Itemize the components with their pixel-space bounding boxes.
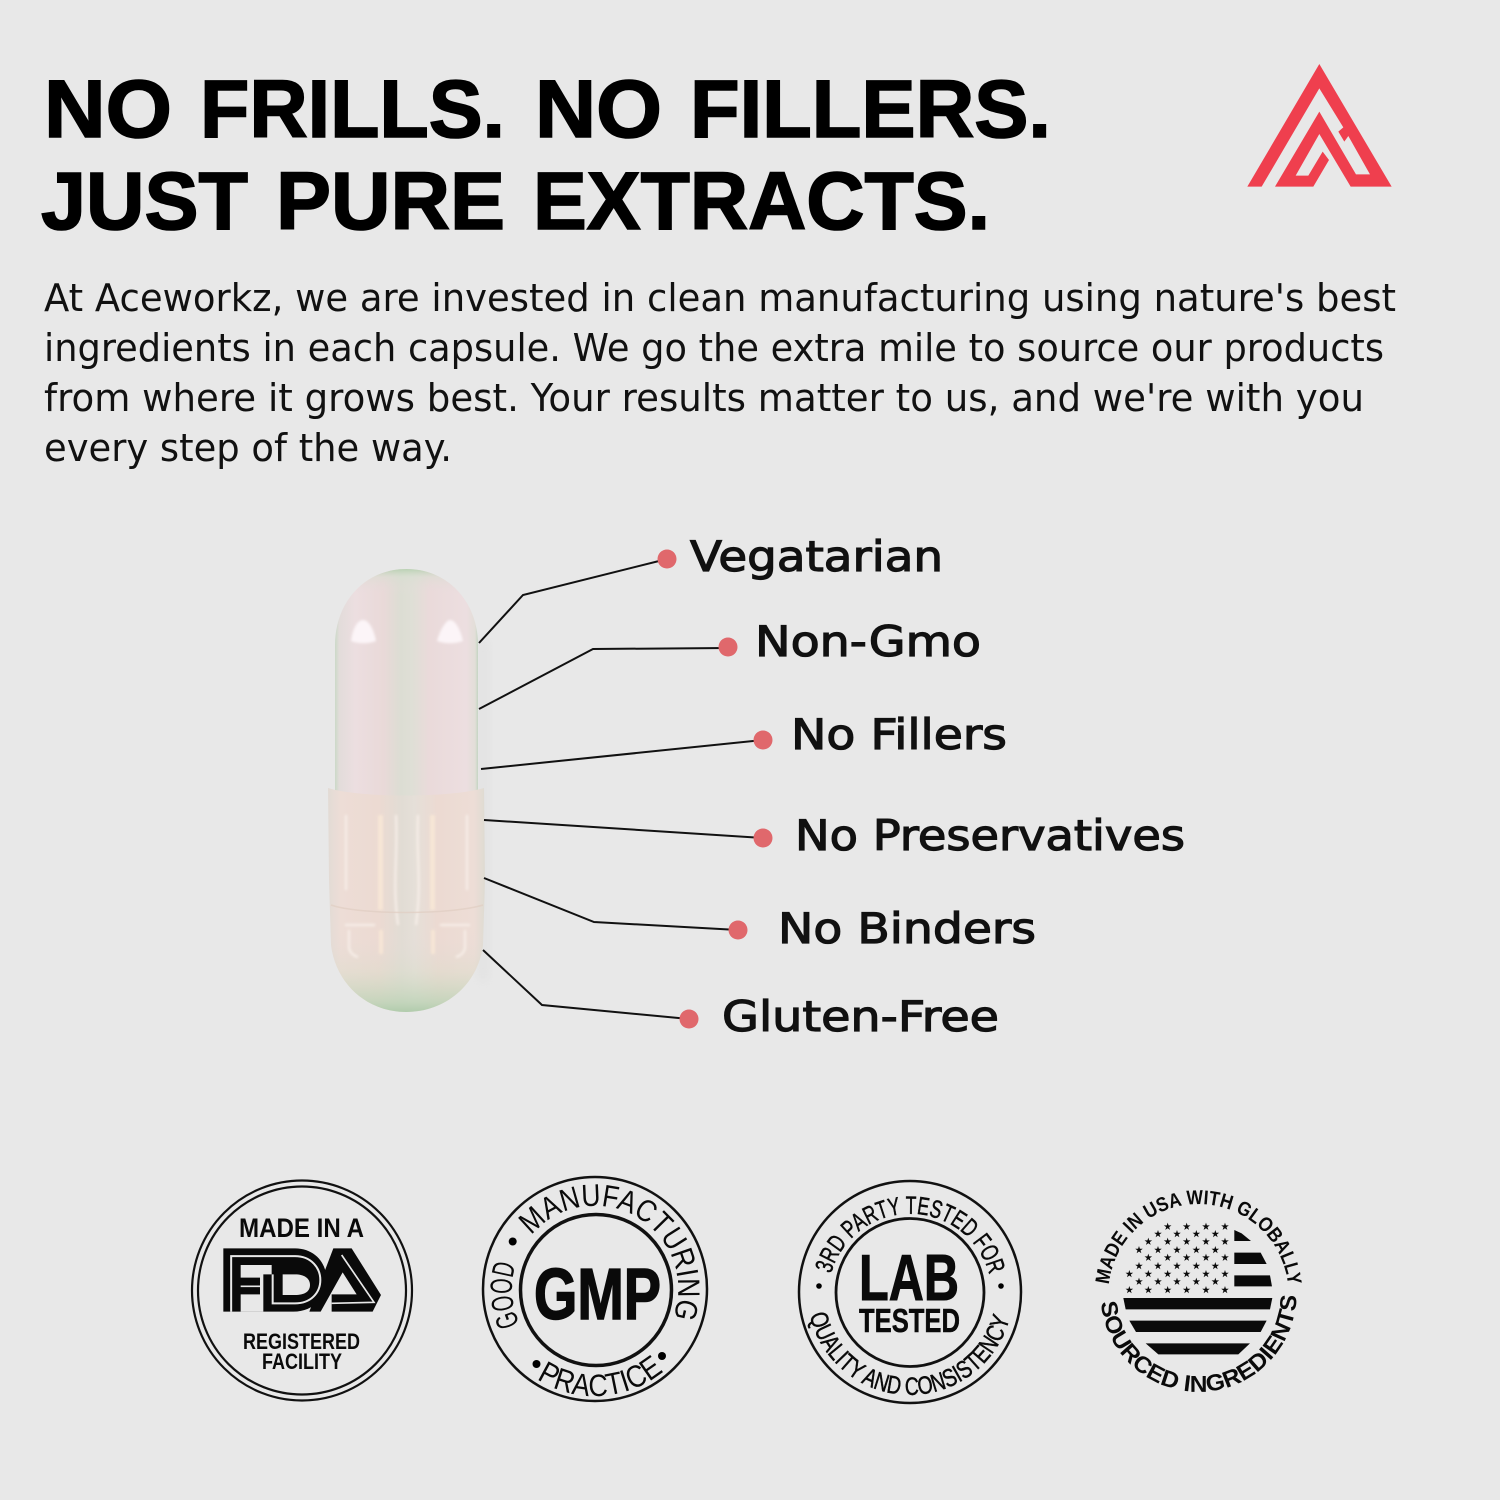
title: JUST <box>41 156 248 247</box>
leader lines <box>479 559 763 1019</box>
intro paragraph: from where it grows best. Your results matter to us, and we're with you <box>44 376 1364 420</box>
badge: made in USA: MADE IN USA WITH GLOBALLY <box>1095 1190 1302 1284</box>
intro paragraph: every step of the way. <box>44 426 452 470</box>
badge: GMP <box>482 1176 708 1402</box>
callout: No Preservatives: No Preservatives <box>795 811 1185 860</box>
intro paragraph <box>44 276 1396 470</box>
intro paragraph: ingredients in each capsule. We go the extra mile to source our products <box>44 326 1384 370</box>
badge: lab tested: 3RD PARTY TESTED FOR <box>816 1196 1004 1274</box>
callout: Vegatarian: Vegatarian <box>690 532 943 581</box>
callout: Non-Gmo: Non-Gmo <box>755 617 981 666</box>
title: FRILLS. <box>200 64 505 155</box>
title: FILLERS. <box>690 64 1051 155</box>
badge: made in USA: SOURCED INGREDIENTS <box>1102 1296 1296 1392</box>
badge: made in USA <box>1095 1190 1302 1392</box>
badge: FDA registered <box>192 1180 412 1400</box>
icon: USA flag <box>1123 1223 1272 1354</box>
title: NO <box>535 64 662 155</box>
callout: No Fillers: No Fillers <box>791 710 1007 759</box>
badge: lab tested: LAB <box>859 1241 959 1314</box>
capsule image <box>328 569 488 1012</box>
callout: Gluten-Free: Gluten-Free <box>722 992 999 1041</box>
intro paragraph: At Aceworkz, we are invested in clean manufacturing using nature's best <box>44 276 1396 320</box>
title <box>41 64 1051 247</box>
badge: lab tested: QUALITY AND CONSISTENCY <box>808 1312 1008 1396</box>
icon: FDA logo <box>223 1248 381 1312</box>
badge: lab tested <box>798 1180 1022 1404</box>
badge: lab tested: TESTED <box>859 1302 960 1339</box>
title: NO <box>44 64 172 155</box>
badge: FDA registered: MADE IN A <box>239 1213 364 1243</box>
badge: GMP: GMP <box>534 1255 661 1335</box>
badge: FDA registered: REGISTERED <box>243 1329 360 1354</box>
title: PURE <box>276 156 505 247</box>
badge: GMP: PRACTICE <box>538 1355 663 1396</box>
badge: GMP: GOOD <box>490 1262 518 1328</box>
badge: GMP: MANUFACTURING <box>518 1184 700 1320</box>
icon: brand logo <box>1247 64 1392 187</box>
title: EXTRACTS. <box>533 156 990 247</box>
callout: No Binders: No Binders <box>778 904 1036 953</box>
badge: FDA registered: FACILITY <box>262 1349 342 1374</box>
